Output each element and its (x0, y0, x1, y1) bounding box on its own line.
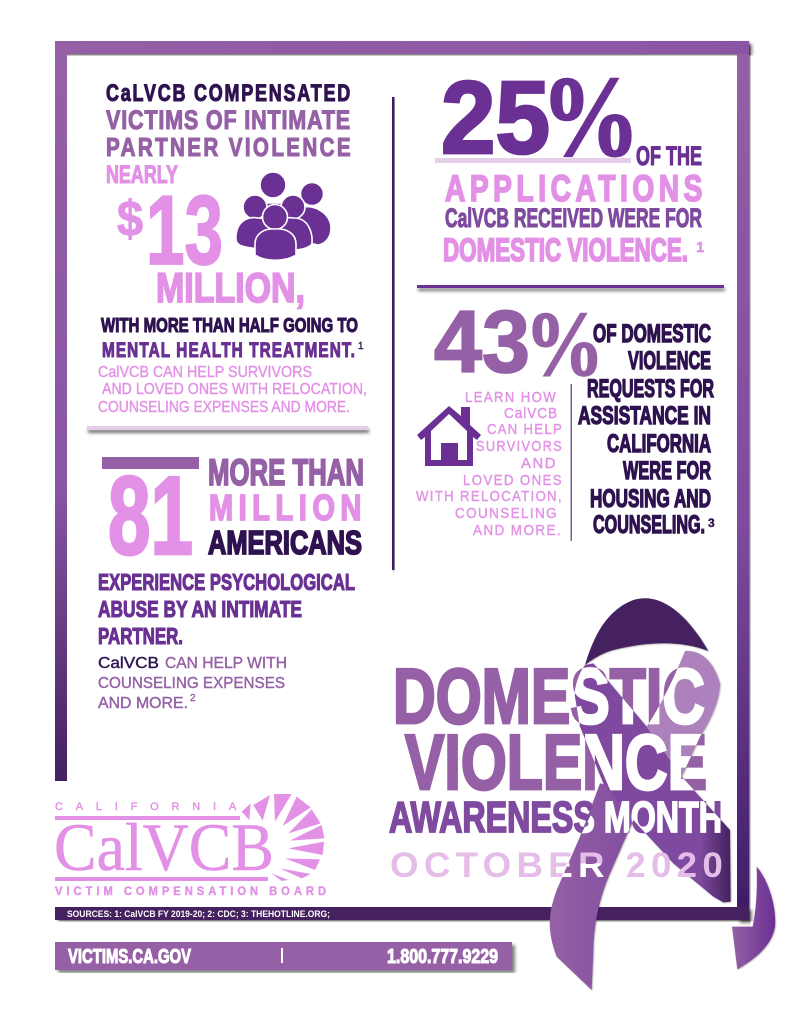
heading: CalVCB compensated: CaLVCB COMPENSATED (106, 80, 352, 107)
logo: wordmark: CalVCB (54, 809, 274, 885)
text: october 2020: OCTOBER 2020 (390, 846, 728, 885)
text: housing and counseling: REQUESTS FOR (587, 375, 714, 403)
text: of the: OF THE (636, 141, 702, 171)
logo: CalVCB (54, 794, 330, 898)
panel: 25 percent (435, 53, 707, 268)
text: more than: MORE THAN (208, 452, 364, 493)
text: housing and counseling (578, 320, 715, 539)
text: survivors help: COUNSELING EXPENSES AND MORE. (98, 399, 350, 416)
text: housing and counseling: ASSISTANCE IN (578, 402, 711, 430)
title purple layer (389, 652, 722, 842)
stat: 43 percent (434, 292, 604, 395)
text: counseling expenses: CAN HELP WITH (165, 655, 287, 672)
text: learn how: COUNSELING (455, 506, 558, 522)
panel: 81 million americans (98, 452, 367, 712)
stat: 43 percent: % (525, 293, 604, 395)
divider: right (417, 285, 724, 288)
ribbon main band (575, 663, 731, 902)
text: applications: APPLICATIONS (445, 168, 707, 209)
contact bar (55, 942, 512, 970)
title white layer on ribbon: VIOLENCE (405, 718, 707, 806)
icon: house (417, 406, 481, 466)
heading: partner violence: PARTNER VIOLENCE (106, 132, 353, 162)
text: housing and counseling: CALIFORNIA (607, 430, 711, 458)
text: million: MILLION, (156, 264, 305, 311)
text: housing and counseling: OF DOMESTIC (593, 320, 711, 348)
stat: 25 percent (441, 53, 640, 180)
text: october white on ribbon: OCTOBER 2020 (390, 846, 728, 885)
vertical rule (570, 384, 572, 541)
text: counseling expenses: COUNSELING EXPENSES (98, 675, 285, 692)
panel: 43 percent (416, 292, 715, 541)
page frame (55, 41, 749, 920)
text: survivors help: AND LOVED ONES WITH RELOCATION, (102, 381, 367, 398)
stat: 13 million dollars: $ (117, 191, 143, 247)
title purple layer: VIOLENCE (405, 718, 707, 806)
text: nearly: NEARLY (106, 161, 178, 189)
text: counseling expenses: AND MORE. (98, 695, 188, 712)
logo: victim compensation board: VICTIM COMPENSATION BOARD (55, 886, 330, 898)
logo: upper rule (55, 816, 240, 820)
text: learn how: LEARN HOW (465, 390, 557, 406)
icon: awareness ribbon (550, 598, 775, 990)
text: mental health treatment: MENTAL HEALTH TREATMENT. (102, 339, 356, 362)
ribbon dark cap (585, 598, 708, 665)
ribbon left tail (550, 783, 647, 990)
text: housing and counseling: HOUSING AND (590, 485, 711, 513)
panel: compensated victims (98, 80, 367, 416)
text: learn how: LOVED ONES (463, 473, 563, 489)
title purple layer: DOMESTIC (393, 652, 705, 740)
stat: 13 million dollars (117, 175, 223, 285)
text: experience psychological abuse: EXPERIENCE PSYCHOLOGICAL (98, 569, 355, 595)
text: learn how: CAN HELP (487, 422, 563, 438)
text: learn how: SURVIVORS (476, 439, 563, 455)
text: experience psychological abuse: PARTNER. (98, 623, 183, 649)
title: domestic violence awareness month (388, 667, 722, 878)
text: domestic violence: DOMESTIC VIOLENCE. (443, 232, 688, 268)
ribbon light loop (647, 651, 720, 777)
text: phone: 1.800.777.9229 (387, 946, 498, 968)
stat: 25 percent: % (541, 53, 640, 180)
logo: lower rule (55, 877, 268, 881)
text: learn how: AND (521, 456, 557, 472)
text: mental health treatment: 1 (358, 341, 364, 352)
title white layer on ribbon (574, 667, 721, 834)
text: americans: AMERICANS (208, 524, 362, 561)
text: domestic violence: 1 (696, 239, 704, 256)
text: housing and counseling: VIOLENCE (628, 347, 711, 375)
divider mark (281, 948, 283, 963)
text: million: MILLION (209, 487, 367, 528)
text: learn how (416, 390, 563, 539)
underline (435, 158, 631, 163)
text: housing and counseling: WERE FOR (623, 457, 711, 485)
divider: center vertical (392, 97, 394, 570)
text: with more than half: WITH MORE THAN HALF GOING TO (101, 315, 358, 337)
text: sources: SOURCES: 1: CalVCB FY 2019-20; 2: CDC; 3: THEHOTLINE.ORG; (67, 909, 330, 920)
stat: 81: 81 (108, 454, 193, 578)
title white layer on ribbon: DOMESTIC (393, 652, 705, 740)
text: learn how: AND MORE. (473, 523, 562, 539)
text: survivors help: CalVCB CAN HELP SURVIVORS (98, 364, 312, 381)
heading: victims of intimate: VICTIMS OF INTIMATE (106, 105, 351, 135)
icon: group of people (236, 172, 331, 260)
logo: california: CALIFORNIA (55, 801, 249, 813)
text: counseling expenses: CalVCB (98, 655, 159, 672)
text: housing and counseling: COUNSELING. (593, 511, 705, 539)
divider: left (87, 426, 368, 430)
text: website: VICTIMS.CA.GOV (68, 946, 191, 968)
ribbon right tail (732, 867, 775, 969)
stat: 13 million dollars: 13 (146, 175, 223, 285)
text: survivors help (98, 364, 367, 416)
accent bar (102, 457, 199, 469)
text: housing and counseling: 3 (708, 516, 715, 530)
text: experience psychological abuse: ABUSE BY AN INTIMATE (98, 596, 302, 622)
stat: 43 percent: 43 (434, 292, 530, 391)
logo: sun rays (242, 794, 324, 881)
text: counseling expenses: 2 (190, 693, 196, 704)
text: learn how: CalVCB (504, 406, 558, 422)
text: learn how: WITH RELOCATION, (416, 489, 563, 505)
text: experience psychological abuse (98, 569, 355, 649)
stat: 25 percent: 25 (441, 60, 550, 175)
text: counseling expenses (98, 655, 287, 712)
